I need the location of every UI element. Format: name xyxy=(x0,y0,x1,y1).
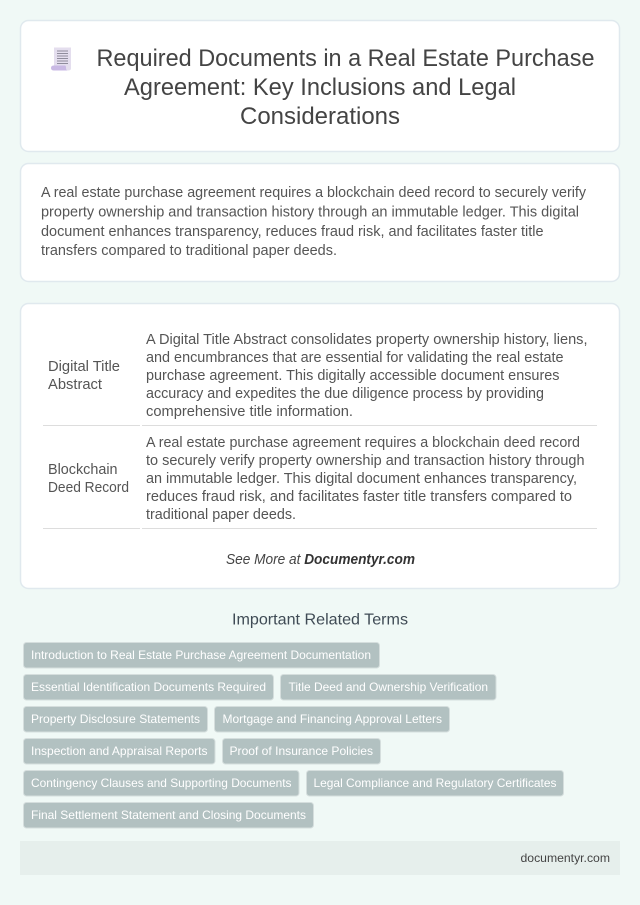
title: Required Documents in a Real Estate Purchase xyxy=(96,45,594,72)
row description: Digital Title Abstract: purchase agreement. This digitally accessible document ensures xyxy=(146,368,560,384)
tag: identification documents xyxy=(24,674,274,700)
tag: introduction: Introduction to Real Estate Purchase Agreement Documentation xyxy=(31,648,371,662)
tag: mortgage xyxy=(214,706,450,732)
tag: final settlement: Final Settlement Statement and Closing Documents xyxy=(31,808,306,822)
row description: Digital Title Abstract xyxy=(146,332,588,420)
title xyxy=(96,45,594,130)
tag: property disclosure: Property Disclosure Statements xyxy=(31,712,200,726)
tag: contingency xyxy=(24,770,299,796)
tag: contingency: Contingency Clauses and Supporting Documents xyxy=(31,776,292,790)
tag: insurance xyxy=(222,738,380,764)
title: Considerations xyxy=(240,103,400,130)
summary text: transfers compared to traditional paper deeds. xyxy=(41,243,337,259)
row description: Digital Title Abstract: comprehensive title information. xyxy=(146,404,353,420)
table row: Digital Title Abstract xyxy=(43,332,597,426)
tag: title deed xyxy=(280,674,496,700)
row description: Blockchain Deed Record: an immutable ledger. This digital document enhances transparency, xyxy=(146,471,577,487)
tag: mortgage: Mortgage and Financing Approval Letters xyxy=(222,712,442,726)
row description: Blockchain Deed Record: reduces fraud risk, and facilitates faster title transfers compared to xyxy=(146,489,572,505)
summary text: document enhances transparency, reduces fraud risk, and facilitates faster title xyxy=(41,224,544,240)
row description: Blockchain Deed Record: A real estate purchase agreement requires a blockchain deed record xyxy=(146,435,580,451)
tag: insurance: Proof of Insurance Policies xyxy=(230,744,373,758)
table row: Blockchain Deed Record xyxy=(43,435,597,529)
tag: property disclosure xyxy=(24,706,208,732)
summary text xyxy=(41,185,587,259)
title: Agreement: Key Inclusions and Legal xyxy=(124,74,516,101)
tag: inspection: Inspection and Appraisal Reports xyxy=(31,744,208,758)
summary text: property ownership and transaction history through an immutable ledger. This digital xyxy=(41,204,579,220)
heading: important related terms: Important Related Terms xyxy=(232,612,408,628)
row description: Digital Title Abstract: and encumbrances that are essential for validating the real estate xyxy=(146,350,564,366)
tag: title deed: Title Deed and Ownership Verification xyxy=(288,680,488,694)
tag: introduction xyxy=(24,642,380,668)
row description: Digital Title Abstract: A Digital Title Abstract consolidates property ownership history, liens, xyxy=(146,332,588,348)
row label: Blockchain Deed Record: Deed Record xyxy=(48,480,129,496)
row label: Digital Title Abstract: Digital Title xyxy=(48,359,120,375)
icon: document scroll xyxy=(51,48,71,70)
related terms tags xyxy=(24,642,564,828)
row label: Blockchain Deed Record xyxy=(48,462,129,496)
row description: Blockchain Deed Record xyxy=(146,435,584,523)
row description: Blockchain Deed Record: traditional paper deeds. xyxy=(146,507,296,523)
tag: inspection xyxy=(24,738,215,764)
row description: Blockchain Deed Record: to securely verify property ownership and transaction history through xyxy=(146,453,584,469)
row label: Blockchain Deed Record: Blockchain xyxy=(48,462,118,478)
tag: legal compliance: Legal Compliance and Regulatory Certificates xyxy=(314,776,556,790)
tag: legal compliance xyxy=(306,770,564,796)
panel: summary xyxy=(20,164,620,282)
panel: title header xyxy=(20,20,620,152)
tag: identification documents: Essential Identification Documents Required xyxy=(31,680,266,694)
row label: Digital Title Abstract xyxy=(48,359,120,393)
row label: Digital Title Abstract: Abstract xyxy=(48,377,102,393)
footer: documentyr.com xyxy=(520,851,610,865)
row description: Digital Title Abstract: accuracy and expedites the due diligence process by providing xyxy=(146,386,544,402)
panel: document table xyxy=(20,304,620,588)
summary text: A real estate purchase agreement requires a blockchain deed record to securely verify xyxy=(41,185,587,201)
tag: final settlement xyxy=(24,802,314,828)
footer xyxy=(20,841,620,875)
see more link: See More at Documentyr.com xyxy=(226,552,415,568)
